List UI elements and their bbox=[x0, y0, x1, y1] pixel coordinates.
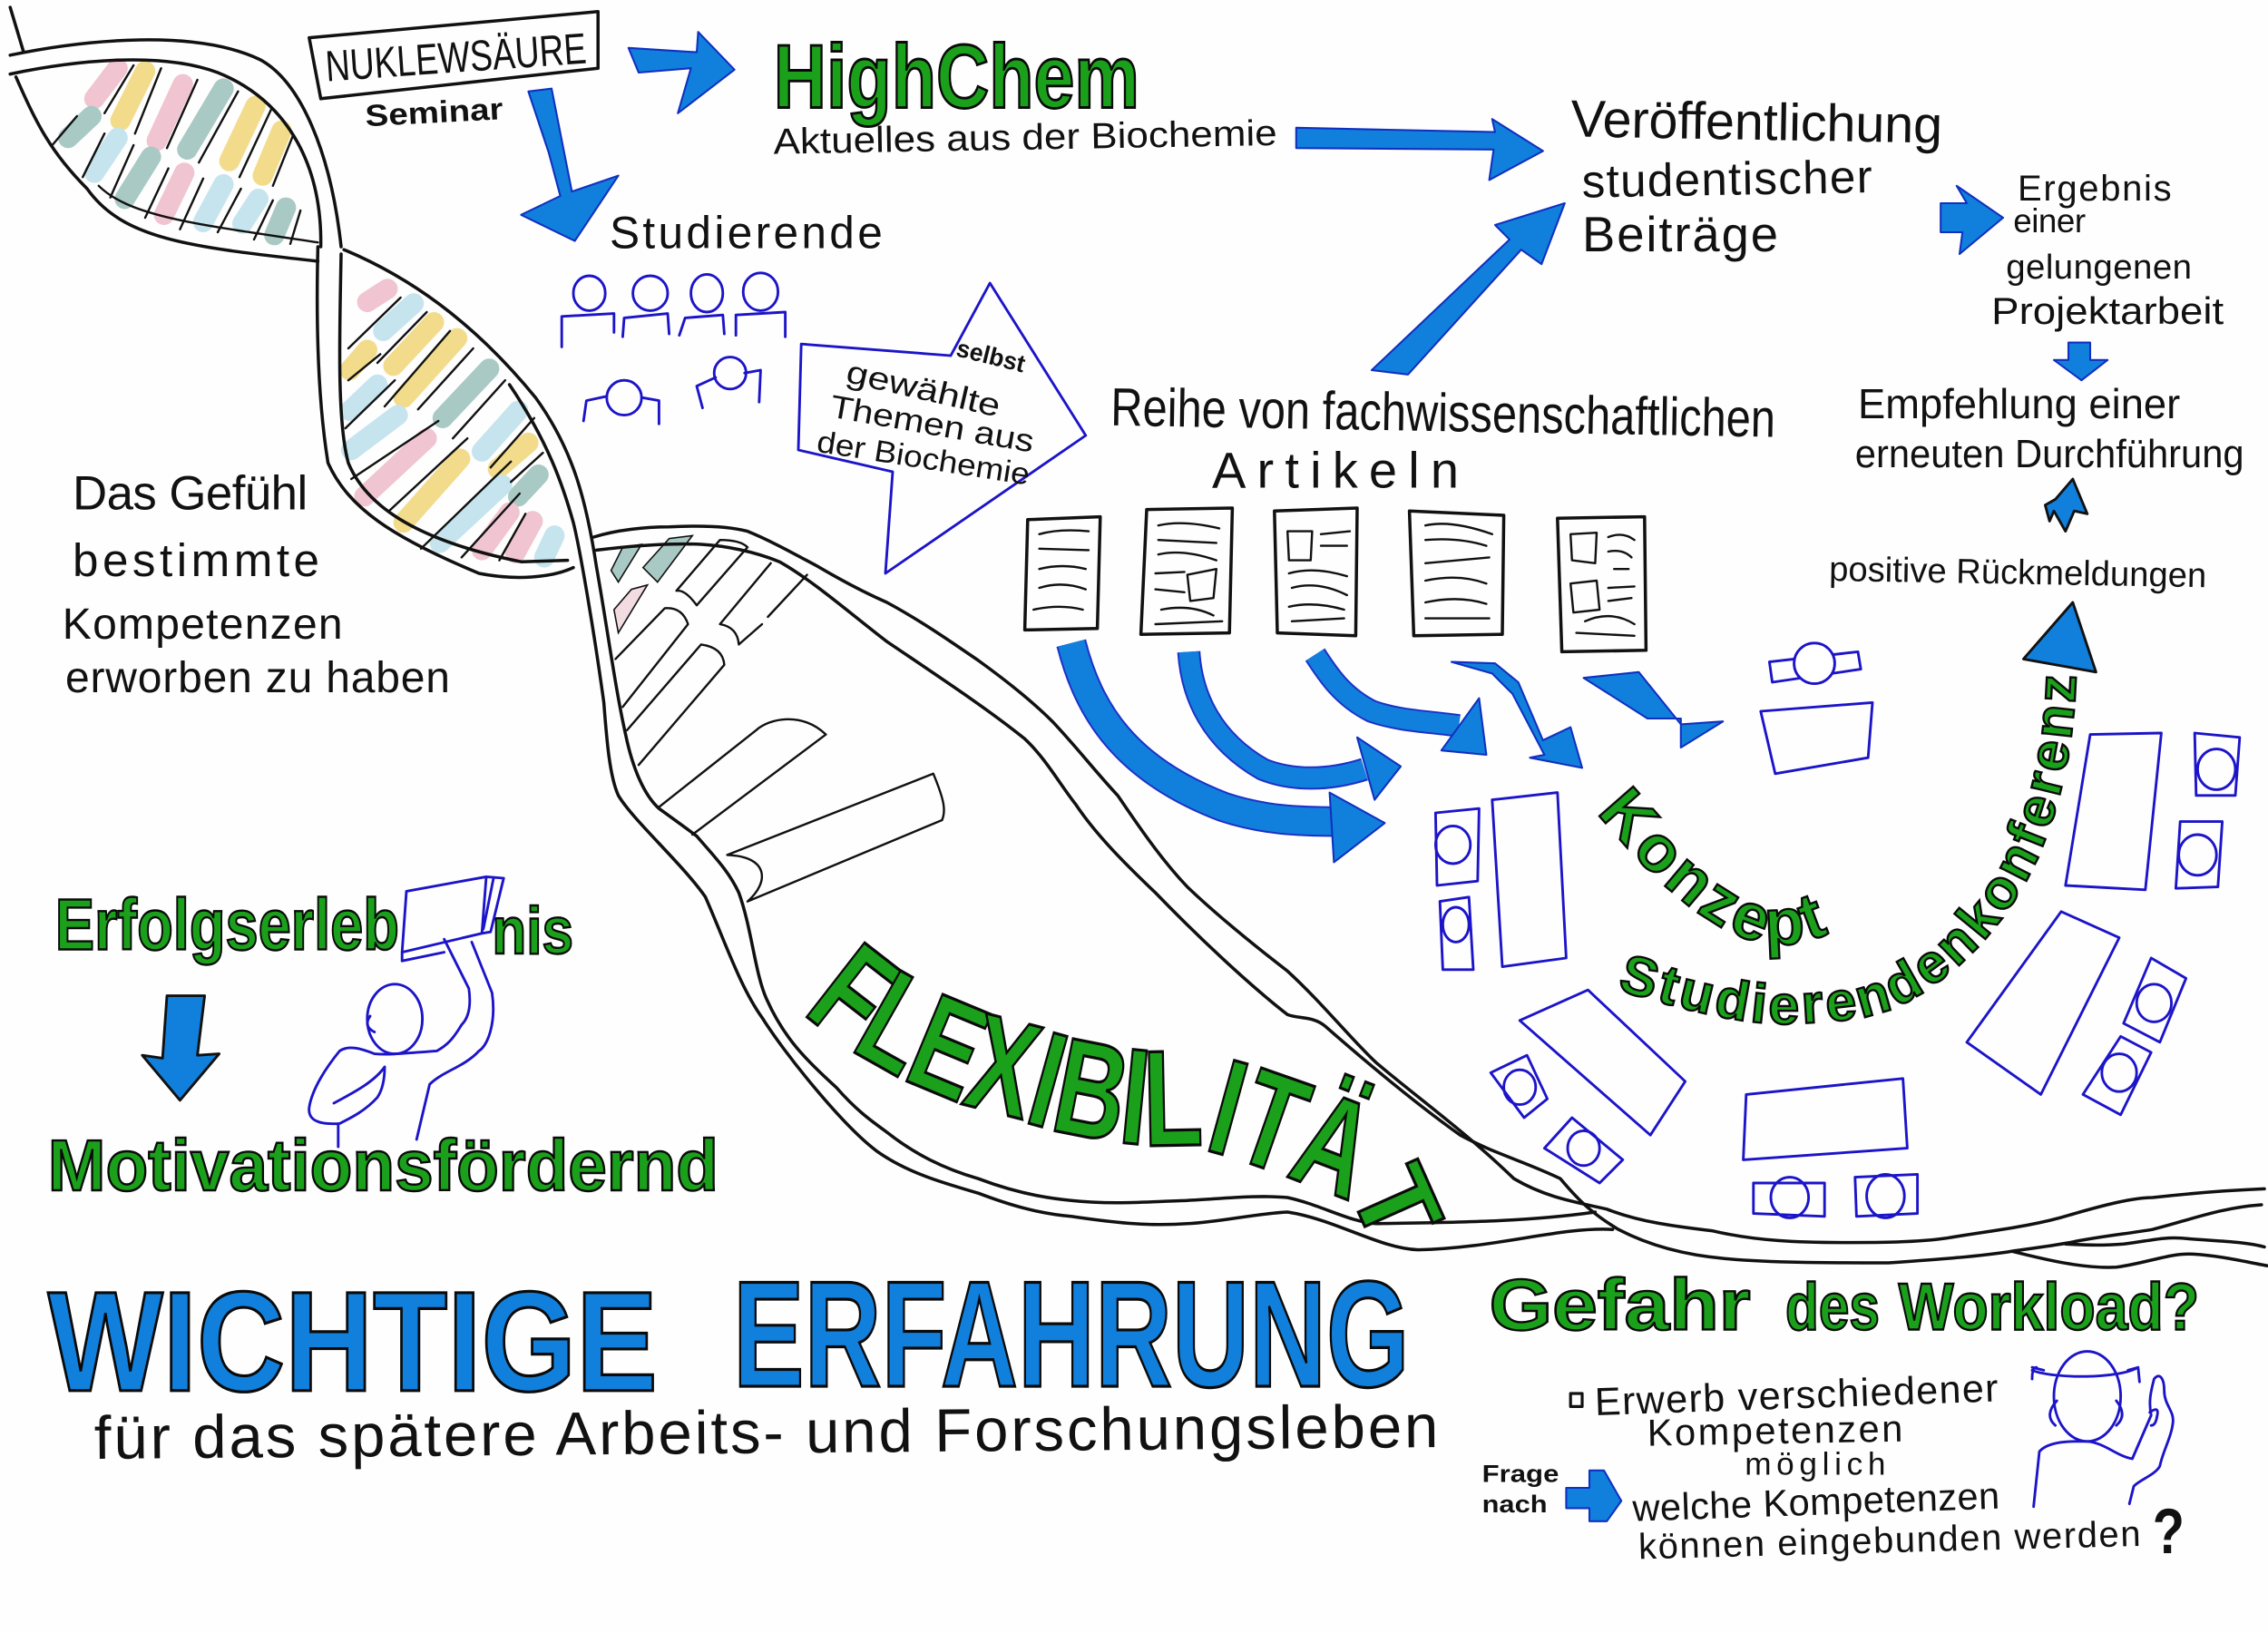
lobe 3 outlined rungs and bars bbox=[615, 540, 944, 902]
heading: Motivationsfördernd: Motivationsfördernd bbox=[48, 1125, 719, 1206]
arrow to result bbox=[1941, 186, 2003, 254]
text: positive Rückmeldungen: positive Rückmeldungen bbox=[1829, 550, 2207, 595]
callout: selbst gewählte Themen: Themen aus bbox=[827, 389, 1037, 460]
label: Seminar: Seminar bbox=[365, 93, 503, 133]
list: Erwerb verschiedener Kompetenzen möglich: Kompetenzen bbox=[1647, 1407, 1903, 1454]
callout: selbst gewählte Themen bbox=[798, 283, 1086, 573]
text: Veröffentlichung studentischer Beiträge: Veröffentlichung bbox=[1570, 90, 1943, 155]
list: Erwerb verschiedener Kompetenzen möglich bbox=[1570, 1366, 1999, 1482]
table bottom bbox=[1744, 1079, 1907, 1159]
text: welche Kompetenzen können eingebunden werden?: ? bbox=[2153, 1495, 2185, 1567]
text: Empfehlung einer erneuten Durchführung: erneuten Durchführung bbox=[1855, 433, 2244, 476]
heading: Gefahr des Workload?: des bbox=[1785, 1269, 1880, 1345]
table right bbox=[2066, 733, 2161, 890]
callout: selbst gewählte Themen: selbst bbox=[953, 334, 1028, 377]
arrow to question bbox=[1566, 1471, 1621, 1521]
title: WICHTIGE ERFAHRUNG bbox=[48, 1250, 1410, 1422]
arrow down to Motivationsfördernd bbox=[142, 996, 220, 1100]
small down arrow bbox=[2054, 343, 2107, 380]
subtitle: für das spätere Arbeits- und Forschungsleben: für das spätere Arbeits- und Forschungsleben bbox=[93, 1393, 1439, 1472]
heading: Erfolgserlebnis: nis bbox=[492, 893, 573, 968]
table bottom left bbox=[1520, 990, 1686, 1135]
text: Veröffentlichung studentischer Beiträge: studentischer bbox=[1581, 151, 1872, 208]
arrow from articles to publication bbox=[1372, 203, 1565, 375]
text: Reihe von fachwissenschaftlichen Artikeln bbox=[1110, 376, 1776, 499]
lobe 1 rungs bbox=[53, 65, 300, 244]
box: Nukleinsäure seminar: NUKLEWSÄURE bbox=[324, 25, 588, 92]
text: Ergebnis einer gelungenen Projektarbeit bbox=[1991, 169, 2224, 332]
list: Erwerb verschiedener Kompetenzen möglich: Erwerb verschiedener bbox=[1594, 1366, 1999, 1424]
text: welche Kompetenzen können eingebunden werden?: welche Kompetenzen bbox=[1631, 1474, 2000, 1530]
lobe 1 coloured base pairs bbox=[68, 68, 286, 235]
lobe 2 rungs bbox=[346, 298, 543, 561]
icons: five article pages bbox=[1025, 508, 1646, 651]
table left bbox=[1492, 793, 1566, 967]
text: Das Gefühl bestimmte Kompetenzen erworben zu haben: bestimmte bbox=[73, 534, 319, 586]
label: Frage nach: Frage bbox=[1482, 1460, 1559, 1488]
arrow to students bbox=[521, 89, 619, 241]
title: WICHTIGE ERFAHRUNG: ERFAHRUNG bbox=[733, 1250, 1410, 1419]
text: Ergebnis einer gelungenen Projektarbeit: Ergebnis bbox=[2018, 169, 2172, 209]
text: welche Kompetenzen können eingebunden werden? bbox=[1631, 1474, 2185, 1567]
heading: Gefahr des Workload?: Gefahr bbox=[1490, 1265, 1751, 1345]
arrow to publication bbox=[1296, 119, 1543, 180]
triangle arrow head bbox=[2023, 602, 2096, 672]
text: Veröffentlichung studentischer Beiträge bbox=[1570, 90, 1943, 262]
icon: person holding up book bbox=[309, 876, 503, 1147]
label: Frage nach: nach bbox=[1482, 1490, 1548, 1518]
heading: FLEXIBILITÄT: T bbox=[1326, 1148, 1466, 1260]
callout: selbst gewählte Themen: der Biochemie bbox=[815, 425, 1032, 493]
text: Ergebnis einer gelungenen Projektarbeit: Projektarbeit bbox=[1991, 289, 2224, 332]
curved blue arrows from articles to conference bbox=[1071, 643, 1723, 862]
callout: selbst gewählte Themen: gewählte bbox=[843, 355, 1004, 424]
box: Nukleinsäure seminar bbox=[309, 12, 598, 99]
conference tables and people bbox=[1435, 643, 2240, 1217]
heading: FLEXIBILITÄT: FLEXIBILITÄ bbox=[806, 941, 1375, 1202]
heading: HighChem: HighChem bbox=[774, 26, 1139, 127]
arrow to HighChem bbox=[629, 32, 735, 113]
text: Das Gefühl bestimmte Kompetenzen erworben zu haben: Das Gefühl bbox=[73, 467, 308, 521]
icon: person thinking with thumb up bbox=[2032, 1352, 2173, 1507]
strand outlines bbox=[10, 7, 24, 51]
text: Empfehlung einer erneuten Durchführung bbox=[1855, 380, 2244, 476]
text: Reihe von fachwissenschaftlichen Artikeln: Reihe von fachwissenschaftlichen bbox=[1110, 376, 1776, 449]
list: Erwerb verschiedener Kompetenzen möglich: möglich bbox=[1745, 1447, 1885, 1482]
text: Das Gefühl bestimmte Kompetenzen erworben zu haben bbox=[63, 467, 450, 702]
text: Veröffentlichung studentischer Beiträge: Beiträge bbox=[1582, 207, 1778, 262]
heading: Konzept: Konzept bbox=[1598, 785, 1830, 960]
heading: Erfolgserlebnis: Erfolgserleb bbox=[55, 884, 399, 964]
text: Das Gefühl bestimmte Kompetenzen erworben zu haben: Kompetenzen bbox=[63, 601, 343, 649]
text: Ergebnis einer gelungenen Projektarbeit: einer bbox=[2013, 202, 2086, 240]
heading: Gefahr des Workload?: Workload? bbox=[1899, 1269, 2199, 1345]
heading: Studierendenkonferenz: Studierendenkonferenz bbox=[1620, 676, 2077, 1025]
lobe 3 coloured base pairs bbox=[611, 535, 692, 633]
text: Empfehlung einer erneuten Durchführung: Empfehlung einer bbox=[1858, 380, 2180, 427]
lobe 2 coloured base pairs bbox=[350, 288, 554, 557]
text: Reihe von fachwissenschaftlichen Artikeln: Artikeln bbox=[1212, 442, 1459, 499]
icon: students group bbox=[562, 273, 786, 424]
small up arrow bbox=[2045, 479, 2087, 532]
heading: Gefahr des Workload? bbox=[1490, 1265, 2199, 1345]
text: Ergebnis einer gelungenen Projektarbeit: gelungenen bbox=[2006, 248, 2192, 287]
label: Frage nach bbox=[1482, 1460, 1559, 1518]
text: welche Kompetenzen können eingebunden werden?: können eingebunden werden bbox=[1637, 1514, 2141, 1567]
table top bbox=[1761, 702, 1872, 774]
subheading: Aktuelles aus der Biochemie: Aktuelles aus der Biochemie bbox=[773, 113, 1277, 162]
DNA double helix bbox=[10, 7, 2267, 1267]
table bottom right bbox=[1967, 912, 2119, 1094]
title: WICHTIGE ERFAHRUNG: WICHTIGE bbox=[48, 1263, 658, 1422]
text: Studierende: Studierende bbox=[610, 208, 883, 259]
text: Das Gefühl bestimmte Kompetenzen erworben zu haben: erworben zu haben bbox=[65, 654, 450, 702]
